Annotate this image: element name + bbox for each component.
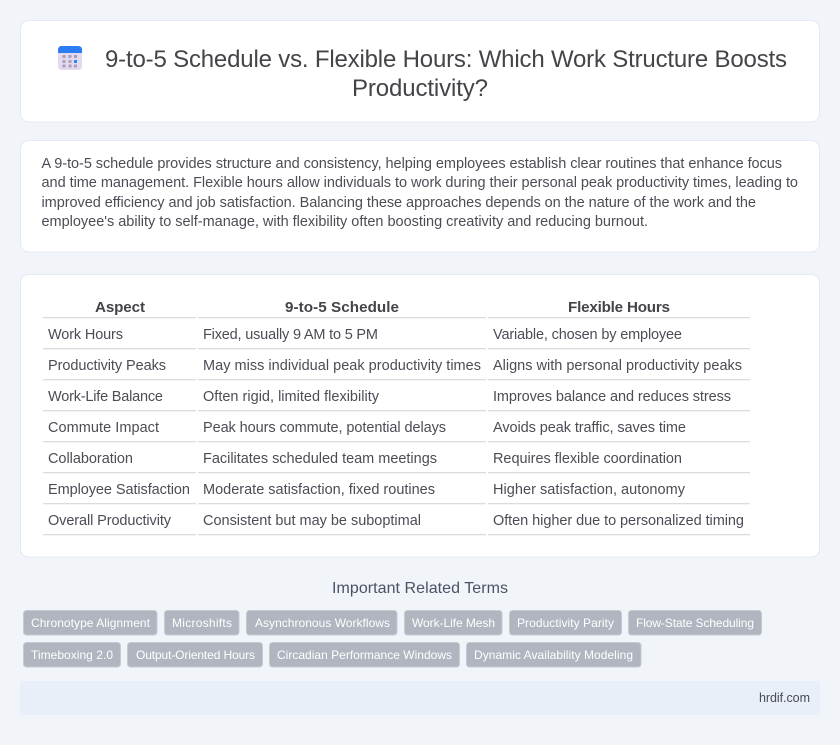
- table rules: [43, 317, 750, 535]
- row: work-life balance: Improves balance and reduces stress: [493, 389, 731, 405]
- row: overall productivity: Consistent but may be suboptimal: [203, 513, 421, 529]
- row: work-life balance: Often rigid, limited flexibility: [203, 389, 380, 405]
- tag: flow-state scheduling: [628, 610, 762, 635]
- tag list: [24, 610, 762, 667]
- panel: title card: [20, 20, 820, 122]
- row: work hours: [48, 327, 682, 343]
- row: commute impact: Peak hours commute, potential delays: [203, 420, 446, 436]
- row: work hours: Variable, chosen by employee: [493, 327, 682, 343]
- row: collaboration: Requires flexible coordination: [493, 451, 682, 467]
- tag: dynamic availability modeling: Dynamic Availability Modeling: [474, 648, 633, 662]
- tag: timeboxing 2.0: Timeboxing 2.0: [31, 648, 113, 662]
- panel: intro paragraph: [20, 140, 820, 252]
- row: work hours: Fixed, usually 9 AM to 5 PM: [203, 327, 378, 343]
- tag: dynamic availability modeling: [466, 642, 641, 667]
- row: employee satisfaction: Moderate satisfaction, fixed routines: [203, 482, 435, 498]
- row: productivity peaks: May miss individual peak productivity times: [203, 358, 481, 374]
- footer: [20, 681, 820, 715]
- table header: 9-to-5 Schedule: [285, 299, 399, 316]
- row: work hours: Work Hours: [48, 327, 123, 343]
- tag: productivity parity: [510, 610, 622, 635]
- tag: microshifts: Microshifts: [172, 616, 232, 630]
- row: productivity peaks: Productivity Peaks: [48, 358, 166, 374]
- tag: work-life mesh: Work-Life Mesh: [412, 616, 495, 630]
- row: collaboration: Facilitates scheduled team meetings: [203, 451, 437, 467]
- table header: Aspect: [95, 299, 145, 316]
- row: productivity peaks: [48, 358, 742, 374]
- intro text: improved efficiency and job satisfaction. Balancing these approaches depends on the nature of the work and the: [42, 195, 756, 211]
- row: work-life balance: [48, 389, 731, 405]
- row: employee satisfaction: [48, 482, 686, 498]
- intro text: and time management. Flexible hours allow individuals to work during their personal peak productivity times, leading to: [42, 175, 798, 191]
- row: productivity peaks: Aligns with personal productivity peaks: [493, 358, 742, 374]
- tag: chronotype alignment: [24, 610, 157, 635]
- panel: comparison table: [20, 274, 820, 557]
- footer: hrdif.com: [759, 691, 810, 705]
- tag: asynchronous workflows: Asynchronous Workflows: [255, 616, 390, 630]
- row: work-life balance: Work-Life Balance: [48, 389, 163, 405]
- intro text: employee's ability to self-manage, with flexibility often boosting creativity and reducing burnout.: [42, 214, 648, 230]
- tag: microshifts: [164, 610, 239, 635]
- row: commute impact: Commute Impact: [48, 420, 159, 436]
- row: employee satisfaction: Employee Satisfaction: [48, 482, 190, 498]
- heading: related terms: Important Related Terms: [332, 580, 508, 597]
- tag: timeboxing 2.0: [24, 642, 120, 667]
- tag: circadian performance windows: Circadian Performance Windows: [277, 648, 452, 662]
- title: [105, 46, 787, 102]
- title: Productivity?: [352, 75, 488, 102]
- tag: asynchronous workflows: [246, 610, 397, 635]
- tag: flow-state scheduling: Flow-State Scheduling: [636, 616, 754, 630]
- row: overall productivity: Often higher due to personalized timing: [493, 513, 744, 529]
- intro text: A 9-to-5 schedule provides structure and consistency, helping employees establish clear routines that enhance focus: [42, 156, 782, 172]
- row: employee satisfaction: Higher satisfaction, autonomy: [493, 482, 686, 498]
- tag: output-oriented hours: [128, 642, 262, 667]
- table header: Flexible Hours: [568, 299, 670, 316]
- icon: calendar: [58, 46, 82, 70]
- tag: chronotype alignment: Chronotype Alignment: [31, 616, 151, 630]
- table header: [95, 299, 670, 316]
- row: overall productivity: [48, 513, 744, 529]
- row: collaboration: Collaboration: [48, 451, 133, 467]
- row: commute impact: [48, 420, 686, 436]
- row: commute impact: Avoids peak traffic, saves time: [493, 420, 686, 436]
- row: collaboration: [48, 451, 682, 467]
- tag: productivity parity: Productivity Parity: [517, 616, 614, 630]
- title: 9-to-5 Schedule vs. Flexible Hours: Which Work Structure Boosts: [105, 46, 787, 73]
- tag: work-life mesh: [404, 610, 502, 635]
- intro text: [42, 156, 798, 230]
- tag: circadian performance windows: [270, 642, 460, 667]
- tag: output-oriented hours: Output-Oriented Hours: [136, 648, 255, 662]
- row: overall productivity: Overall Productivity: [48, 513, 172, 529]
